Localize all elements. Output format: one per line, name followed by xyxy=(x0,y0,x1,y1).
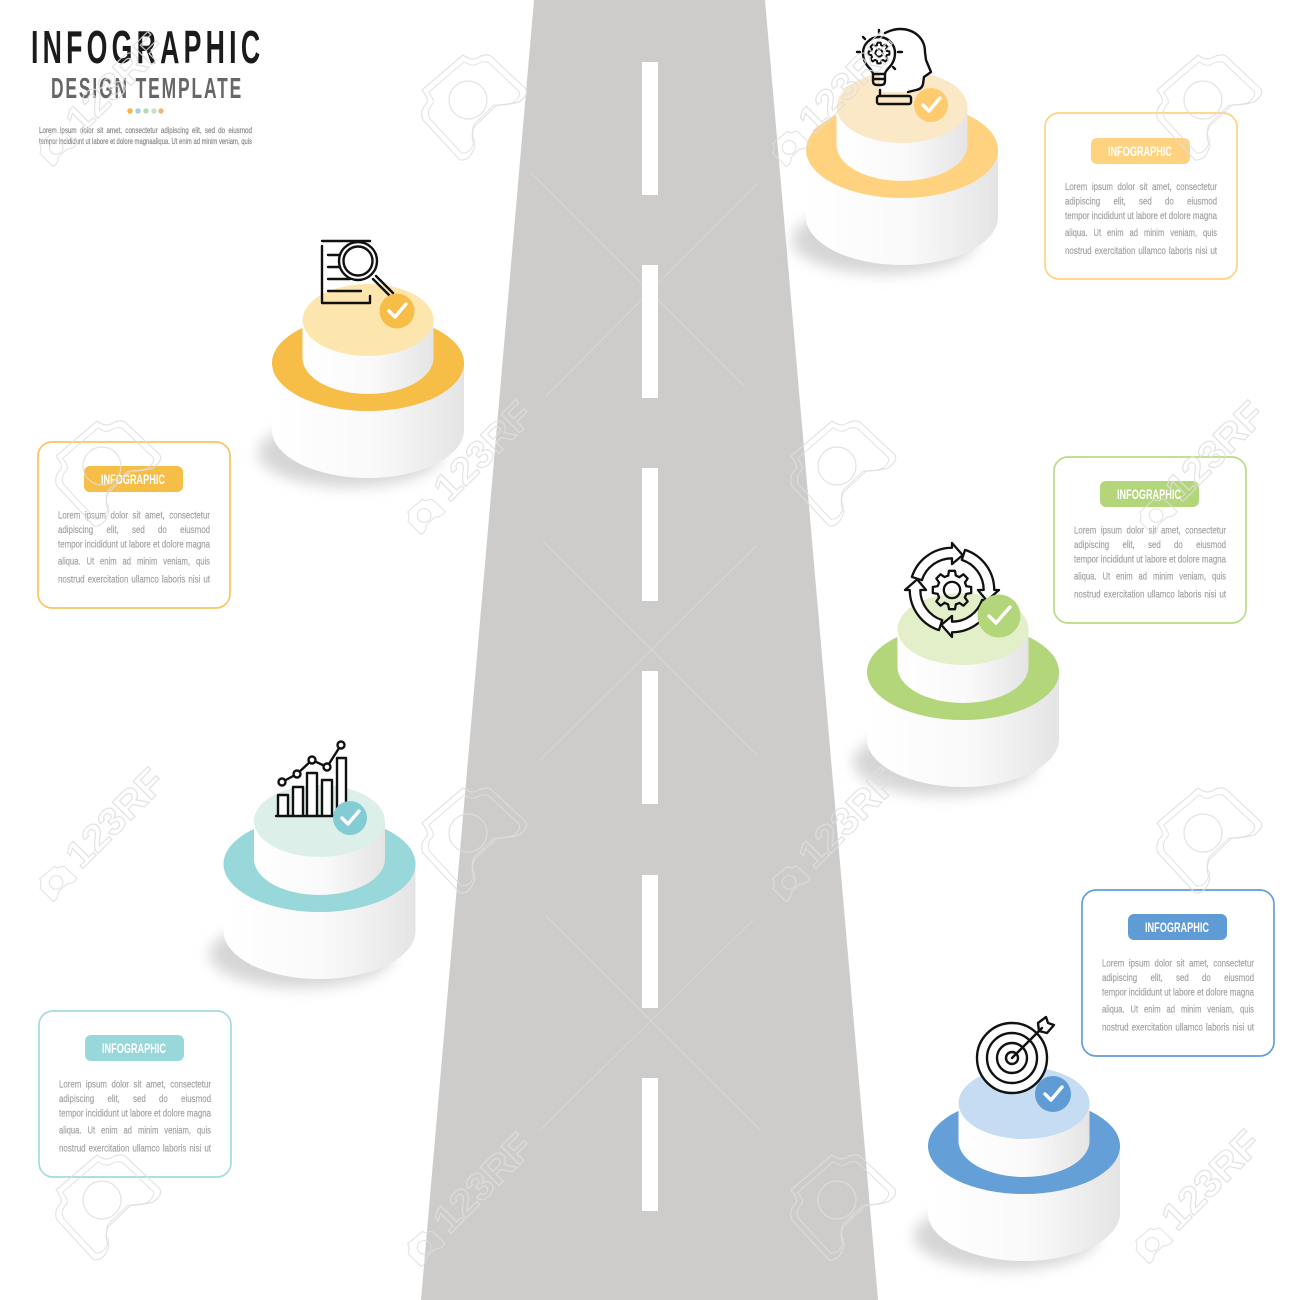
body text xyxy=(1074,526,1227,600)
body text: adipiscing elit, sed do eiusmod xyxy=(1074,540,1226,551)
body text: aliqua. Ut enim ad minim veniam, quis xyxy=(59,1126,211,1136)
body text: nostrud exercitation ullamco laboris nisi ut xyxy=(1065,246,1217,257)
body text xyxy=(58,510,211,586)
body text: aliqua. Ut enim ad minim veniam, quis xyxy=(58,556,210,568)
body text: tempor incididunt ut labore et dolore magna xyxy=(1074,554,1226,566)
body text: nostrud exercitation ullamco laboris nisi ut xyxy=(58,574,210,586)
panel: orange text card xyxy=(38,442,230,608)
body text xyxy=(59,1080,212,1154)
body text: aliqua. Ut enim ad minim veniam, quis xyxy=(1102,1004,1254,1016)
body text: adipiscing elit, sed do eiusmod xyxy=(58,525,210,536)
road xyxy=(421,0,878,1300)
panel: green text card xyxy=(1054,457,1246,623)
check badge 2 xyxy=(380,294,414,328)
body text: adipiscing elit, sed do eiusmod xyxy=(59,1094,211,1105)
intro text: tempor incididunt ut labore et dolore magnaaliqua. Ut enim ad minim veniam, quis xyxy=(39,136,252,146)
intro text: Lorem ipsum dolor sit amet, consectetur adipiscing elit, sed do eiusmod xyxy=(39,125,252,135)
body text: adipiscing elit, sed do eiusmod xyxy=(1065,196,1217,208)
watermark overlay: 123RF xyxy=(426,1126,542,1242)
pill label: INFOGRAPHIC xyxy=(101,471,165,487)
body text: aliqua. Ut enim ad minim veniam, quis xyxy=(1065,228,1217,239)
body text: Lorem ipsum dolor sit amet, consectetur xyxy=(58,510,211,522)
stack 3: green cylinder xyxy=(853,593,1059,796)
stack 5: blue cylinder xyxy=(914,1067,1120,1270)
watermark overlay: 123RF xyxy=(426,394,542,510)
watermark overlay: 123RF xyxy=(58,761,174,877)
body text: Lorem ipsum dolor sit amet, consectetur xyxy=(59,1080,212,1090)
body text: Lorem ipsum dolor sit amet, consectetur xyxy=(1065,182,1218,193)
pill label xyxy=(1091,138,1190,164)
pill label xyxy=(1100,481,1199,507)
road centre dashes xyxy=(642,62,658,1211)
body text xyxy=(1102,958,1255,1034)
check badge 3 xyxy=(978,594,1020,638)
title block xyxy=(31,21,260,146)
icon: head with lightbulb xyxy=(857,29,931,104)
body text: Lorem ipsum dolor sit amet, consectetur xyxy=(1074,526,1227,536)
pill label xyxy=(84,466,183,492)
pill label xyxy=(85,1035,184,1061)
body text: Lorem ipsum dolor sit amet, consectetur xyxy=(1102,958,1255,970)
intro text xyxy=(39,125,252,146)
body text: tempor incididunt ut labore et dolore magna xyxy=(58,540,210,550)
body text: tempor incididunt ut labore et dolore magna xyxy=(1102,988,1254,998)
watermark overlay: 123RF xyxy=(1158,394,1274,510)
body text: aliqua. Ut enim ad minim veniam, quis xyxy=(1074,572,1226,582)
check badge 4 xyxy=(333,801,367,835)
subtitle: DESIGN TEMPLATE xyxy=(51,73,241,105)
pill label: INFOGRAPHIC xyxy=(1145,919,1209,935)
watermark overlay: 123RF xyxy=(58,26,174,142)
icon: bar chart with trend line xyxy=(276,742,347,816)
body text: nostrud exercitation ullamco laboris nisi ut xyxy=(59,1144,211,1154)
watermark overlay: 123RF xyxy=(791,26,907,142)
body text xyxy=(1065,182,1218,257)
pill label: INFOGRAPHIC xyxy=(1117,486,1181,502)
pill label: INFOGRAPHIC xyxy=(1108,143,1172,159)
body text: adipiscing elit, sed do eiusmod xyxy=(1102,973,1254,984)
colour dots xyxy=(127,108,164,114)
panel: blue text card xyxy=(1082,890,1274,1056)
body text: nostrud exercitation ullamco laboris nisi ut xyxy=(1074,590,1226,600)
pill label: INFOGRAPHIC xyxy=(102,1040,166,1056)
watermark overlay: 123RF xyxy=(1154,1123,1270,1239)
body text: tempor incididunt ut labore et dolore magna xyxy=(59,1108,211,1120)
icon: gear with cycle arrows xyxy=(905,543,999,637)
pill label xyxy=(1128,914,1227,940)
title: INFOGRAPHIC xyxy=(31,21,260,73)
body text: tempor incididunt ut labore et dolore magna xyxy=(1065,211,1217,222)
panel: yellow text card xyxy=(1045,113,1237,279)
icon: target with arrow xyxy=(977,1017,1054,1093)
watermark overlay: 123RF xyxy=(791,761,907,877)
stack 4: teal cylinder xyxy=(210,785,416,988)
panel: teal text card xyxy=(39,1011,231,1177)
icon: document with magnifier xyxy=(322,241,393,303)
check badge 1 xyxy=(914,88,948,122)
stack 2: orange cylinder xyxy=(258,284,464,487)
stack 1: yellow cylinder xyxy=(792,71,998,274)
body text: nostrud exercitation ullamco laboris nisi ut xyxy=(1102,1022,1254,1034)
check badge 5 xyxy=(1035,1076,1071,1112)
